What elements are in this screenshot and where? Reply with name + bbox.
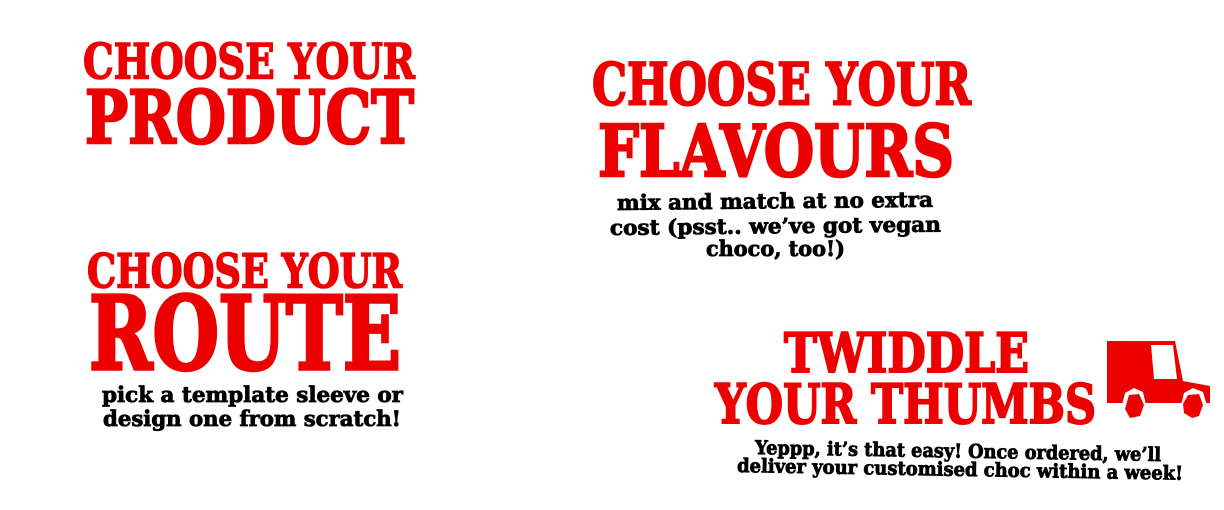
icon: delivery truck — [1107, 341, 1210, 418]
heading: choose your: CHOOSE YOUR — [87, 244, 403, 300]
heading: flavours: FLAVOURS — [598, 109, 954, 193]
text block: route description — [102, 382, 404, 431]
text block: flavours description: choco, too!) — [706, 236, 845, 261]
text block: flavours description: cost (psst.. we’ve got vegan — [610, 212, 941, 240]
heading: route: ROUTE — [89, 274, 401, 393]
panel: choose your route — [87, 244, 404, 431]
heading: choose your: CHOOSE YOUR — [592, 50, 972, 118]
text block: route description: design one from scratch! — [103, 406, 401, 431]
text block: flavours description: mix and match at no extra — [617, 187, 933, 215]
heading: choose your: CHOOSE YOUR — [83, 32, 416, 90]
panel: choose your flavours — [592, 50, 972, 261]
text block: delivery description: deliver your customised choc within a week! — [737, 455, 1183, 485]
panel: twiddle your thumbs — [714, 321, 1210, 485]
text block: flavours description — [610, 187, 941, 261]
heading: twiddle: TWIDDLE — [784, 321, 1029, 385]
heading: your thumbs: YOUR THUMBS — [714, 372, 1096, 436]
text block: delivery description — [737, 437, 1183, 485]
text block: route description: pick a template sleeve or — [102, 382, 404, 407]
heading: product: PRODUCT — [85, 75, 414, 161]
panel: choose your product — [83, 32, 416, 161]
text block: delivery description: Yeppp, it’s that easy! Once ordered, we’ll — [754, 437, 1161, 466]
